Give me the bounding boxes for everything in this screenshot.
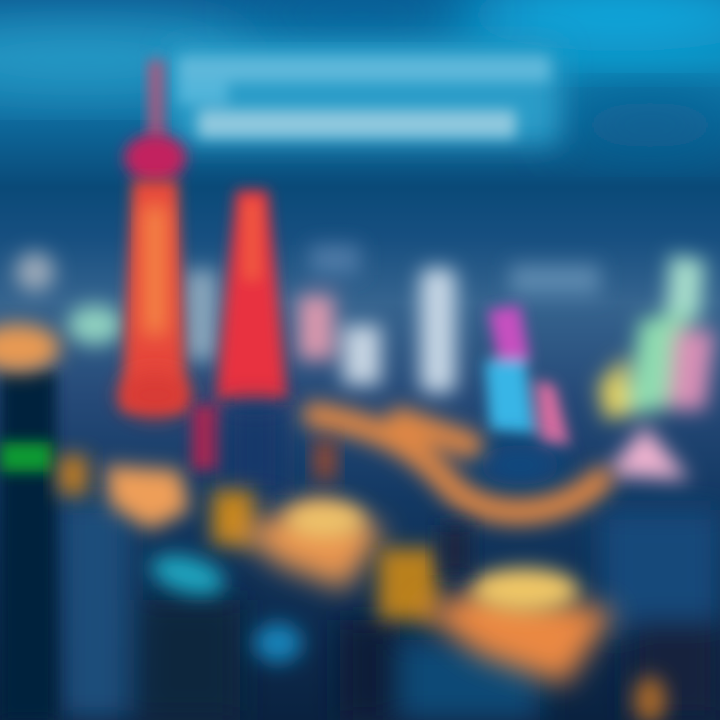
glowing city blocks: [58, 440, 666, 720]
left foreground tower with green band: [0, 324, 60, 720]
title: illegible blurred heading: [170, 45, 560, 145]
distant skyline: [15, 245, 600, 393]
teal and blue rooftop lights: [147, 548, 302, 663]
river: winding orange road: [315, 415, 600, 512]
rainbow building right: [598, 255, 715, 480]
colourful buildings centre right: [485, 305, 570, 445]
dark mid-ground blocks: [60, 405, 720, 720]
second tower: red spire: [192, 190, 287, 470]
left tower: pearl-style: [119, 60, 191, 417]
